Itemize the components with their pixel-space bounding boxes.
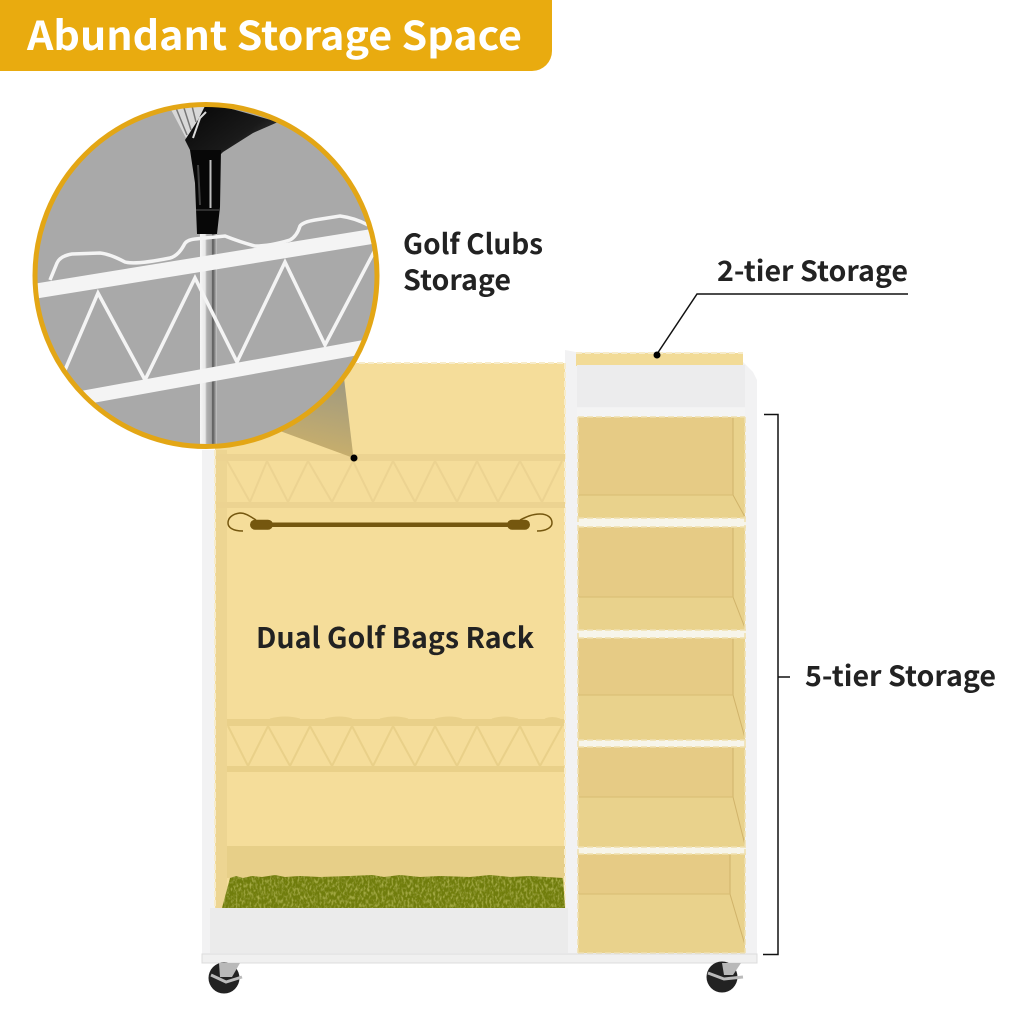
right column: shelves [576,353,746,953]
left bay: dual golf bags rack [210,363,568,953]
zoom circle: golf club in wire rack [30,102,379,452]
label: golf clubs storage [403,223,543,299]
label: 2-tier storage with leader [654,250,908,358]
upper wire rack [216,454,565,508]
cabinet base [202,954,757,963]
label: golf clubs storage: Golf Clubs [403,223,543,263]
club head [168,102,278,234]
label: golf clubs storage: Storage [403,259,511,299]
storage cabinet [202,350,757,994]
upper wire rail [30,216,375,400]
zoom callout pointer [280,378,358,462]
2-tier top compartment [576,353,745,417]
label: dual golf bags rack: Dual Golf Bags Rack [256,616,535,657]
bungee cord [228,513,552,531]
label: 5-tier storage with bracket [763,414,996,954]
right caster wheel [706,962,743,992]
label: 5-tier storage with bracket: 5-tier Storage [805,655,996,695]
front kick panel [210,908,568,953]
cabinet frame [202,350,757,963]
title banner: Abundant Storage Space [26,4,522,62]
label: 2-tier storage with leader: 2-tier Storage [717,250,908,290]
artificial turf mat [222,875,565,908]
lower wire rack [227,717,564,772]
5-tier shelf compartments [578,417,746,953]
club shaft [200,232,217,452]
left caster wheel [208,962,242,994]
